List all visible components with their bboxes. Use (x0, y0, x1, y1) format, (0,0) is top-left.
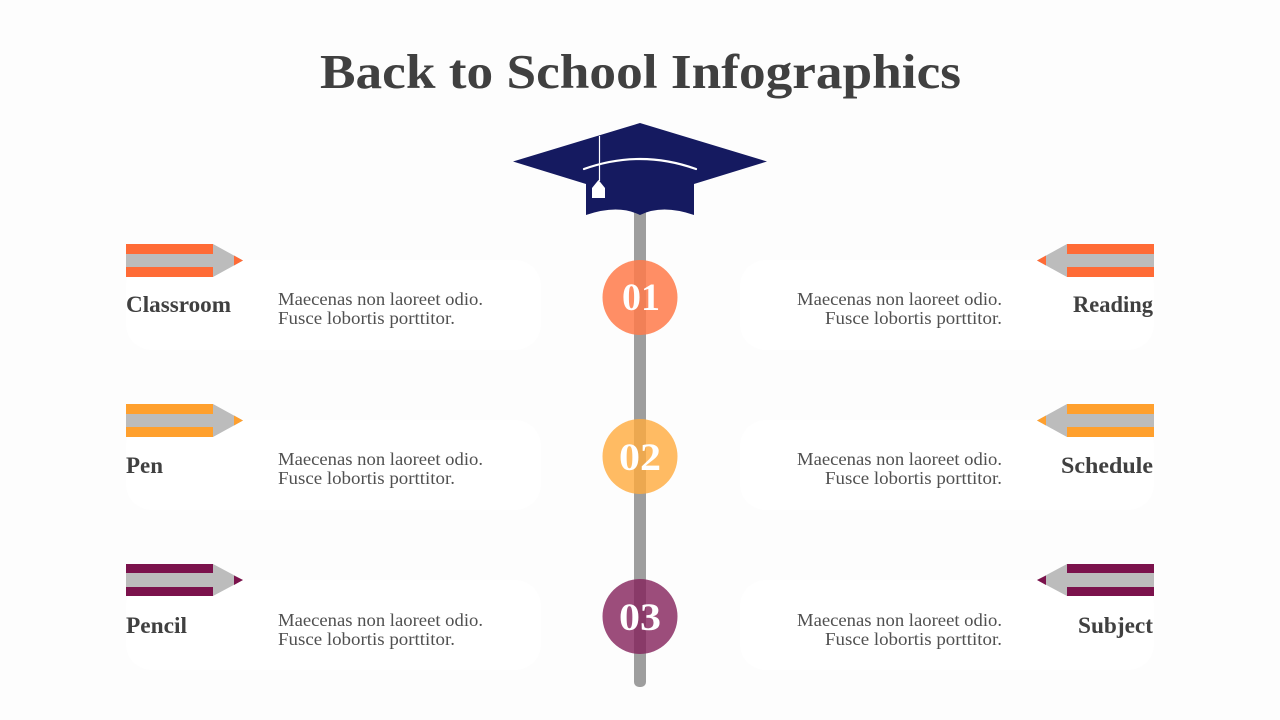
panel: reading card (740, 244, 1154, 350)
description: Schedule (797, 449, 1002, 488)
panel: subject card (740, 564, 1154, 670)
icon: amber pencil (126, 404, 243, 437)
step 03 badge (602, 579, 678, 654)
description: Reading (797, 289, 1002, 328)
central timeline stem (634, 205, 646, 687)
step 01 badge: 01 (622, 276, 660, 319)
label: Schedule: Schedule (1061, 453, 1153, 478)
description: Schedule: Maecenas non laoreet odio. (797, 449, 1002, 469)
icon: purple pencil, mirrored (1037, 564, 1154, 596)
panel: classroom card (126, 244, 541, 350)
description: Subject: Fusce lobortis porttitor. (825, 629, 1002, 649)
step 02 badge (602, 419, 678, 494)
step 01 badge (602, 260, 678, 335)
description: Subject: Maecenas non laoreet odio. (797, 610, 1002, 630)
step 03 badge: 03 (619, 596, 661, 639)
description: Reading: Fusce lobortis porttitor. (825, 308, 1002, 328)
icon: amber pencil, mirrored (1037, 404, 1154, 437)
icon: orange pencil, mirrored (1037, 244, 1154, 277)
icon: orange pencil (126, 244, 243, 277)
label: Subject: Subject (1078, 613, 1153, 638)
icon: purple pencil (126, 564, 243, 596)
label: Pen: Pen (126, 453, 163, 478)
panel: pencil card (126, 564, 541, 670)
description: Classroom: Fusce lobortis porttitor. (278, 308, 455, 328)
description: Pencil: Fusce lobortis porttitor. (278, 629, 455, 649)
description: Subject (797, 610, 1002, 649)
label: Reading: Reading (1073, 292, 1153, 317)
description: Pencil: Maecenas non laoreet odio. (278, 610, 483, 630)
label: Classroom: Classroom (126, 292, 231, 317)
icon: graduation cap (513, 123, 767, 215)
label: Pencil: Pencil (126, 613, 187, 638)
step 02 badge: 02 (619, 436, 661, 479)
description: Pen: Maecenas non laoreet odio. (278, 449, 483, 469)
description: Pencil (278, 610, 483, 649)
description: Classroom: Maecenas non laoreet odio. (278, 289, 483, 309)
panel: schedule card (740, 404, 1154, 510)
panel: pen card (126, 404, 541, 510)
description: Schedule: Fusce lobortis porttitor. (825, 468, 1002, 488)
title: Back to School Infographics (320, 44, 961, 99)
description: Pen (278, 449, 483, 488)
description: Classroom (278, 289, 483, 328)
description: Reading: Maecenas non laoreet odio. (797, 289, 1002, 309)
description: Pen: Fusce lobortis porttitor. (278, 468, 455, 488)
